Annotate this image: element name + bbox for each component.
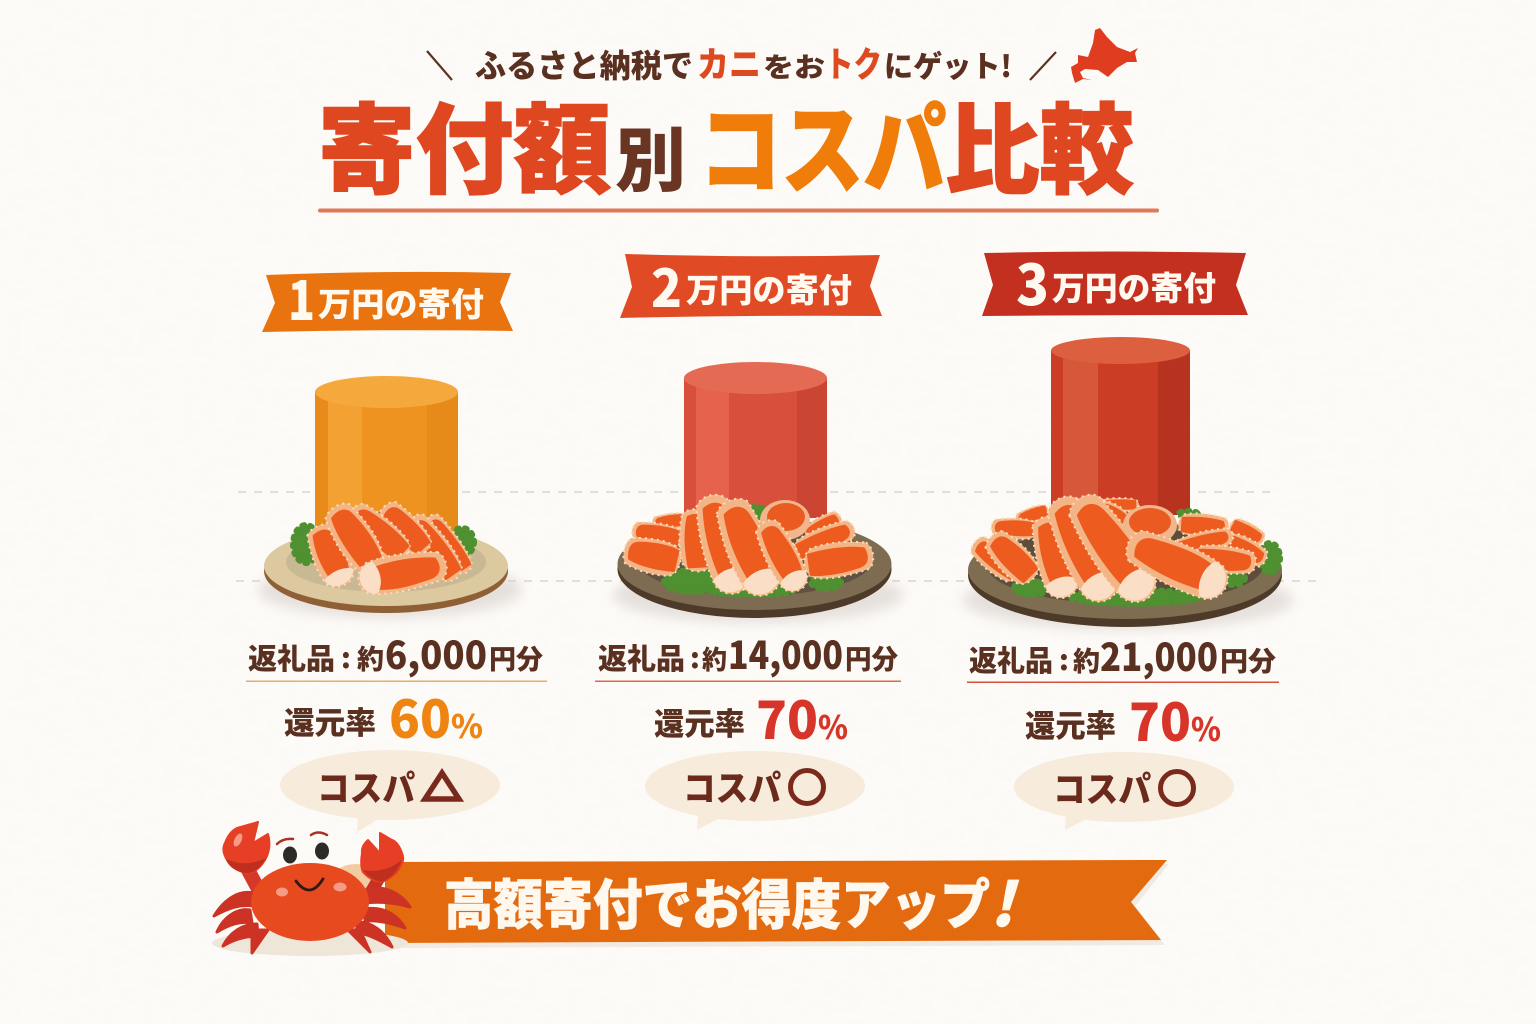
return gift amount: 返礼品 bbox=[248, 636, 335, 678]
header tagline: トク bbox=[825, 37, 882, 88]
return rate 60%: 60 bbox=[389, 678, 451, 753]
title: 比較 bbox=[945, 72, 1134, 214]
return gift amount: 円分 bbox=[489, 638, 543, 677]
return rate 70%: 70 bbox=[1129, 681, 1191, 756]
return gift amount: 約 bbox=[702, 640, 727, 677]
banner: 3万円の寄付: 3 bbox=[1016, 241, 1049, 322]
title underline bbox=[318, 208, 1159, 212]
banner: 1万円の寄付 bbox=[262, 257, 513, 336]
speech bubble: コスパ ○: コスパ bbox=[1053, 762, 1151, 813]
panel: 3万円 bbox=[963, 241, 1293, 830]
banner: 1万円の寄付: 万円の寄付 bbox=[318, 278, 484, 326]
panel: 2万円 bbox=[595, 247, 903, 830]
return rate 60%: % bbox=[451, 702, 483, 748]
plate of crab legs bbox=[963, 486, 1293, 630]
return gift amount: : bbox=[341, 637, 351, 677]
return gift amount: 約 bbox=[357, 638, 384, 677]
plate of crab legs bbox=[258, 496, 522, 618]
return rate 60% bbox=[284, 678, 483, 753]
bar: cylinder 2 bbox=[684, 362, 827, 518]
return gift amount: 6,000 bbox=[385, 625, 487, 680]
return gift amount: 21,000 bbox=[1100, 627, 1218, 682]
header tagline: ふるさと納税で bbox=[475, 41, 693, 87]
speech bubble: コスパ ○ bbox=[645, 751, 865, 830]
speech bubble: コスパ △: コスパ bbox=[317, 761, 415, 812]
bar: cylinder 3 bbox=[1051, 337, 1190, 515]
title bbox=[318, 72, 1134, 214]
return rate 70% bbox=[654, 679, 848, 754]
return gift amount: 返礼品 bbox=[969, 638, 1053, 680]
header tagline: カニ bbox=[697, 37, 761, 88]
return rate 70%: % bbox=[818, 703, 848, 749]
header tagline: をお bbox=[763, 46, 825, 85]
panel: 1万円 bbox=[246, 257, 547, 832]
header tagline bbox=[427, 37, 1056, 88]
bottom ribbon: ! bbox=[990, 857, 1019, 944]
return rate 70% bbox=[1025, 681, 1221, 756]
return gift amount bbox=[967, 627, 1279, 683]
banner: 3万円の寄付: 万円の寄付 bbox=[1052, 262, 1216, 310]
return gift amount: 約 bbox=[1073, 640, 1100, 679]
return gift amount: 円分 bbox=[1220, 640, 1276, 679]
return rate 70%: 70 bbox=[756, 679, 818, 754]
return gift amount: 14,000 bbox=[728, 625, 843, 680]
bar: cylinder 1 bbox=[315, 376, 458, 532]
return gift amount bbox=[246, 625, 547, 682]
return gift amount bbox=[595, 625, 901, 682]
return gift amount: : bbox=[1059, 639, 1069, 679]
return rate 60%: 還元率 bbox=[284, 698, 376, 743]
title: コスパ bbox=[699, 72, 946, 214]
speech bubble: コスパ △ bbox=[280, 750, 500, 832]
return rate 70%: 還元率 bbox=[1025, 701, 1116, 746]
banner: 1万円の寄付: 1 bbox=[288, 257, 315, 336]
icon: crab mascot bbox=[212, 822, 410, 956]
title: 寄付額 bbox=[318, 72, 611, 214]
banner: 3万円の寄付 bbox=[982, 241, 1248, 322]
banner: 2万円の寄付 bbox=[620, 247, 882, 322]
title: 別 bbox=[615, 105, 686, 206]
plate of crab legs bbox=[613, 490, 903, 623]
bottom ribbon: 高額寄付でお得度アップ bbox=[444, 861, 990, 940]
return gift amount: 返礼品 bbox=[598, 636, 685, 678]
speech bubble: コスパ ○: コスパ bbox=[683, 761, 781, 812]
speech bubble: コスパ ○ bbox=[1014, 752, 1234, 830]
return rate 70%: % bbox=[1191, 705, 1221, 751]
return rate 70%: 還元率 bbox=[654, 699, 745, 744]
return gift amount: : bbox=[690, 637, 700, 677]
banner: 2万円の寄付: 万円の寄付 bbox=[686, 264, 852, 312]
return gift amount: 円分 bbox=[845, 638, 898, 677]
bottom ribbon bbox=[385, 857, 1169, 948]
header tagline: にゲット! bbox=[884, 42, 1012, 86]
banner: 2万円の寄付: 2 bbox=[651, 247, 682, 322]
icon: Hokkaido map bbox=[1071, 28, 1138, 83]
